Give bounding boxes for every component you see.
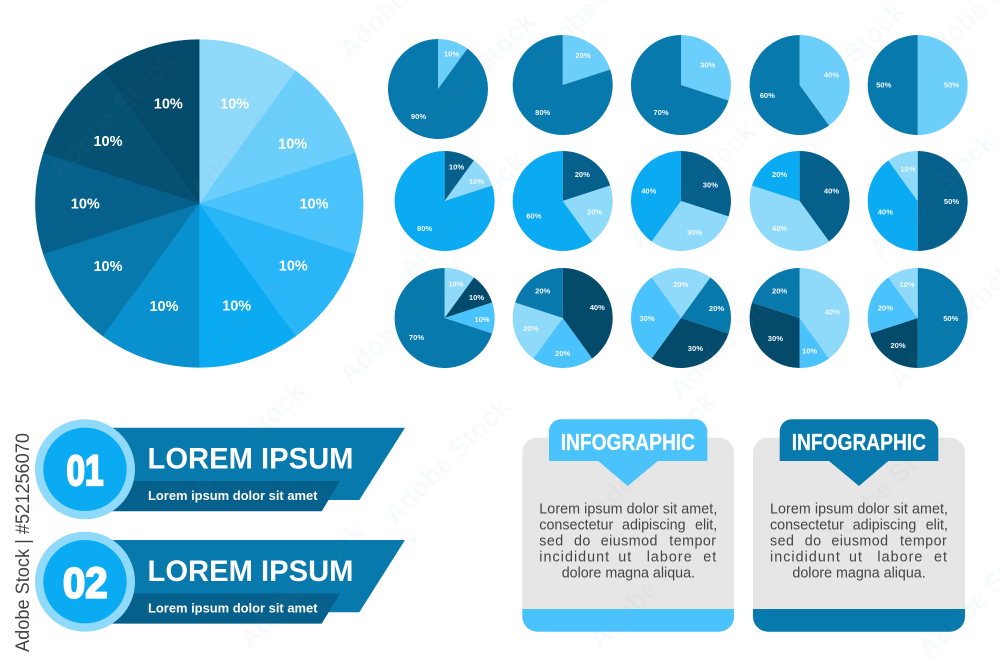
- small pie: 50 / 20 / 20 / 10: 20%: [890, 341, 906, 350]
- small pie: 20 / 20 / 60: 20%: [587, 208, 602, 216]
- small pie: 20 / 20 / 30 / 30: 20%: [709, 304, 724, 313]
- small pie: 40 / 60: [750, 35, 850, 135]
- info card 1: sed: [539, 533, 564, 549]
- small pie: 50 / 40 / 10: 10%: [900, 164, 916, 174]
- small pie: 20 / 20 / 30 / 30: 30%: [688, 344, 703, 353]
- small pie: 40 / 10 / 30 / 20: [750, 268, 850, 368]
- small pie: 50 / 40 / 10: [868, 151, 968, 251]
- large pie chart: ten 10% slices: [35, 40, 363, 368]
- info card 2: dolore magna aliqua.: [792, 565, 926, 581]
- small pie: 50 / 20 / 20 / 10: [868, 268, 968, 368]
- small pie: 30 / 30 / 40: 40%: [641, 186, 657, 196]
- watermark pattern: Adobe Stock: [583, 386, 722, 524]
- small pie: 40 / 10 / 30 / 20: 10%: [802, 346, 817, 356]
- watermark pattern: Adobe Stock: [863, 126, 1000, 264]
- info card 1: INFOGRAPHIC: [561, 429, 695, 455]
- watermark pattern: Adobe Stock: [233, 516, 372, 654]
- watermark pattern: Adobe Stock: [773, 0, 912, 134]
- small pie: 10 / 90: 10%: [444, 50, 459, 58]
- info card 1: Lorem ipsum dolor sit amet,: [539, 501, 717, 517]
- large pie chart: ten 10% slices: 10%: [154, 96, 183, 112]
- small pie: 30 / 70: [631, 35, 731, 135]
- watermark pattern: Adobe Stock: [393, 146, 532, 284]
- large pie chart: ten 10% slices: 10%: [279, 258, 308, 274]
- small pie: 20 / 80: 80%: [535, 108, 551, 117]
- banner 01: LOREM IPSUM: [148, 442, 354, 476]
- info card 2: do: [805, 533, 822, 549]
- info card 2: elit,: [926, 517, 948, 533]
- small pie: 40 / 10 / 30 / 20: 30%: [768, 334, 783, 343]
- small pie: 30 / 30 / 40: [631, 151, 731, 251]
- small pie: 10 / 10 / 10 / 70: 10%: [448, 280, 464, 288]
- small pie: 40 / 10 / 30 / 20: 40%: [825, 308, 840, 316]
- watermark pattern: Adobe Stock: [333, 251, 472, 389]
- small pie: 40 / 40 / 20: 20%: [772, 170, 787, 179]
- info card 2: et: [934, 549, 948, 565]
- info card 1: consectetur: [539, 517, 613, 533]
- info card 1: dolore magna aliqua.: [562, 565, 695, 581]
- small pie: 50 / 20 / 20 / 10: 10%: [899, 280, 915, 289]
- info card 1: et: [703, 549, 717, 565]
- small pie: 10 / 10 / 80: 10%: [449, 162, 464, 172]
- banner 01: 01: [66, 448, 104, 495]
- vertical stock credit: Adobe Stock | #521256070: [13, 433, 34, 652]
- info card 1: ut: [618, 549, 632, 565]
- small pie: 40 / 20 / 20 / 20: 20%: [523, 324, 539, 333]
- small pie: 30 / 70: 30%: [700, 60, 716, 70]
- small pie: 50 / 50: 50%: [876, 80, 892, 90]
- small pie: 30 / 30 / 40: 30%: [703, 180, 718, 190]
- info card 2: tempor: [900, 533, 947, 549]
- small pie: 40 / 40 / 20: [750, 151, 850, 251]
- small pie: 20 / 20 / 60: 20%: [575, 170, 590, 179]
- small pie: 30 / 30 / 40: 30%: [687, 228, 702, 237]
- small pie: 20 / 20 / 30 / 30: 20%: [673, 280, 689, 289]
- small pie: 50 / 20 / 20 / 10: 50%: [943, 314, 959, 323]
- small pie: 40 / 60: 60%: [760, 91, 775, 100]
- info card 1: do: [574, 533, 591, 549]
- info card 1: adipiscing: [622, 517, 686, 533]
- small pie: 40 / 40 / 20: 40%: [824, 186, 839, 196]
- small pie: 10 / 90: [388, 39, 488, 139]
- small pie: 50 / 40 / 10: 50%: [944, 197, 959, 206]
- info card 1: incididunt: [539, 549, 610, 565]
- large pie chart: ten 10% slices: 10%: [220, 97, 249, 113]
- info card 2: labore: [877, 549, 923, 565]
- small pie: 10 / 10 / 10 / 70: [395, 268, 495, 368]
- info card 1: eiusmod: [601, 533, 658, 549]
- small pie: 50 / 50: [868, 35, 968, 135]
- small pie: 40 / 20 / 20 / 20: 20%: [535, 286, 551, 296]
- small pie: 50 / 20 / 20 / 10: 20%: [878, 304, 893, 312]
- small pie: 10 / 10 / 80: 10%: [469, 177, 484, 186]
- watermark pattern: Adobe Stock: [183, 66, 322, 204]
- small pie: 40 / 20 / 20 / 20: 40%: [590, 303, 605, 312]
- small pie: 20 / 20 / 60: 60%: [526, 212, 542, 220]
- watermark pattern: Adobe Stock: [663, 266, 802, 404]
- banner 02: [35, 532, 405, 632]
- large pie chart: ten 10% slices: 10%: [299, 197, 329, 213]
- info card 1: elit,: [695, 517, 717, 533]
- watermark pattern: Adobe Stock: [623, 116, 762, 254]
- info card 2: adipiscing: [853, 517, 916, 533]
- banner 01: Lorem ipsum dolor sit amet: [148, 489, 318, 503]
- small pie: 20 / 20 / 30 / 30: 30%: [639, 314, 655, 323]
- large pie chart: ten 10% slices: 10%: [278, 136, 307, 152]
- small pie: 10 / 90: 90%: [411, 112, 426, 121]
- watermark pattern: Adobe Stock: [208, 216, 347, 354]
- info card 2: [753, 419, 965, 632]
- small pie: 50 / 40 / 10: 40%: [878, 208, 893, 216]
- info card 1: [522, 419, 734, 632]
- small pie: 20 / 20 / 60: [513, 151, 613, 251]
- large pie chart: ten 10% slices: 10%: [222, 298, 251, 314]
- watermark pattern: Adobe Stock: [583, 516, 722, 654]
- large pie chart: ten 10% slices: 10%: [71, 196, 100, 212]
- small pie: 10 / 10 / 10 / 70: 10%: [469, 293, 484, 302]
- small pie: 20 / 80: 20%: [575, 51, 591, 60]
- large pie chart: ten 10% slices: 10%: [93, 134, 123, 150]
- small pie: 40 / 60: 40%: [824, 70, 839, 80]
- watermark pattern: Adobe Stock: [818, 416, 957, 554]
- banner 02: LOREM IPSUM: [148, 555, 354, 588]
- small pie: 30 / 70: 70%: [653, 108, 669, 117]
- banner 02: Lorem ipsum dolor sit amet: [148, 601, 318, 615]
- watermark pattern: Adobe Stock: [378, 391, 517, 529]
- banner 01: [35, 419, 405, 519]
- info card 2: INFOGRAPHIC: [792, 429, 926, 455]
- banner 02: 02: [63, 560, 108, 607]
- small pie: 40 / 20 / 20 / 20: [513, 268, 613, 368]
- watermark pattern: Adobe Stock: [403, 6, 542, 144]
- info card 2: incididunt: [770, 549, 841, 565]
- info card 1: labore: [647, 549, 693, 565]
- info card 2: Lorem ipsum dolor sit amet,: [770, 501, 948, 517]
- small pie: 40 / 10 / 30 / 20: 20%: [772, 286, 787, 296]
- info card 2: ut: [849, 549, 863, 565]
- small pie: 20 / 20 / 30 / 30: [631, 268, 731, 368]
- small pie: 10 / 10 / 80: 80%: [417, 224, 432, 233]
- small pie: 20 / 80: [513, 35, 613, 135]
- small pie: 10 / 10 / 80: [395, 151, 495, 251]
- small pie: 40 / 40 / 20: 40%: [772, 224, 787, 233]
- small pie: 50 / 50: 50%: [944, 80, 959, 90]
- info card 2: eiusmod: [831, 533, 889, 549]
- info card 1: tempor: [669, 533, 717, 549]
- large pie chart: ten 10% slices: 10%: [149, 299, 179, 315]
- info card 2: sed: [770, 533, 794, 549]
- small pie: 40 / 20 / 20 / 20: 20%: [555, 349, 571, 358]
- info card 2: consectetur: [770, 517, 844, 533]
- watermark pattern: Adobe Stock: [173, 376, 312, 514]
- small pie: 10 / 10 / 10 / 70: 70%: [409, 333, 424, 342]
- large pie chart: ten 10% slices: 10%: [93, 259, 123, 275]
- small pie: 10 / 10 / 10 / 70: 10%: [474, 315, 490, 324]
- watermark pattern: Adobe Stock: [43, 46, 182, 184]
